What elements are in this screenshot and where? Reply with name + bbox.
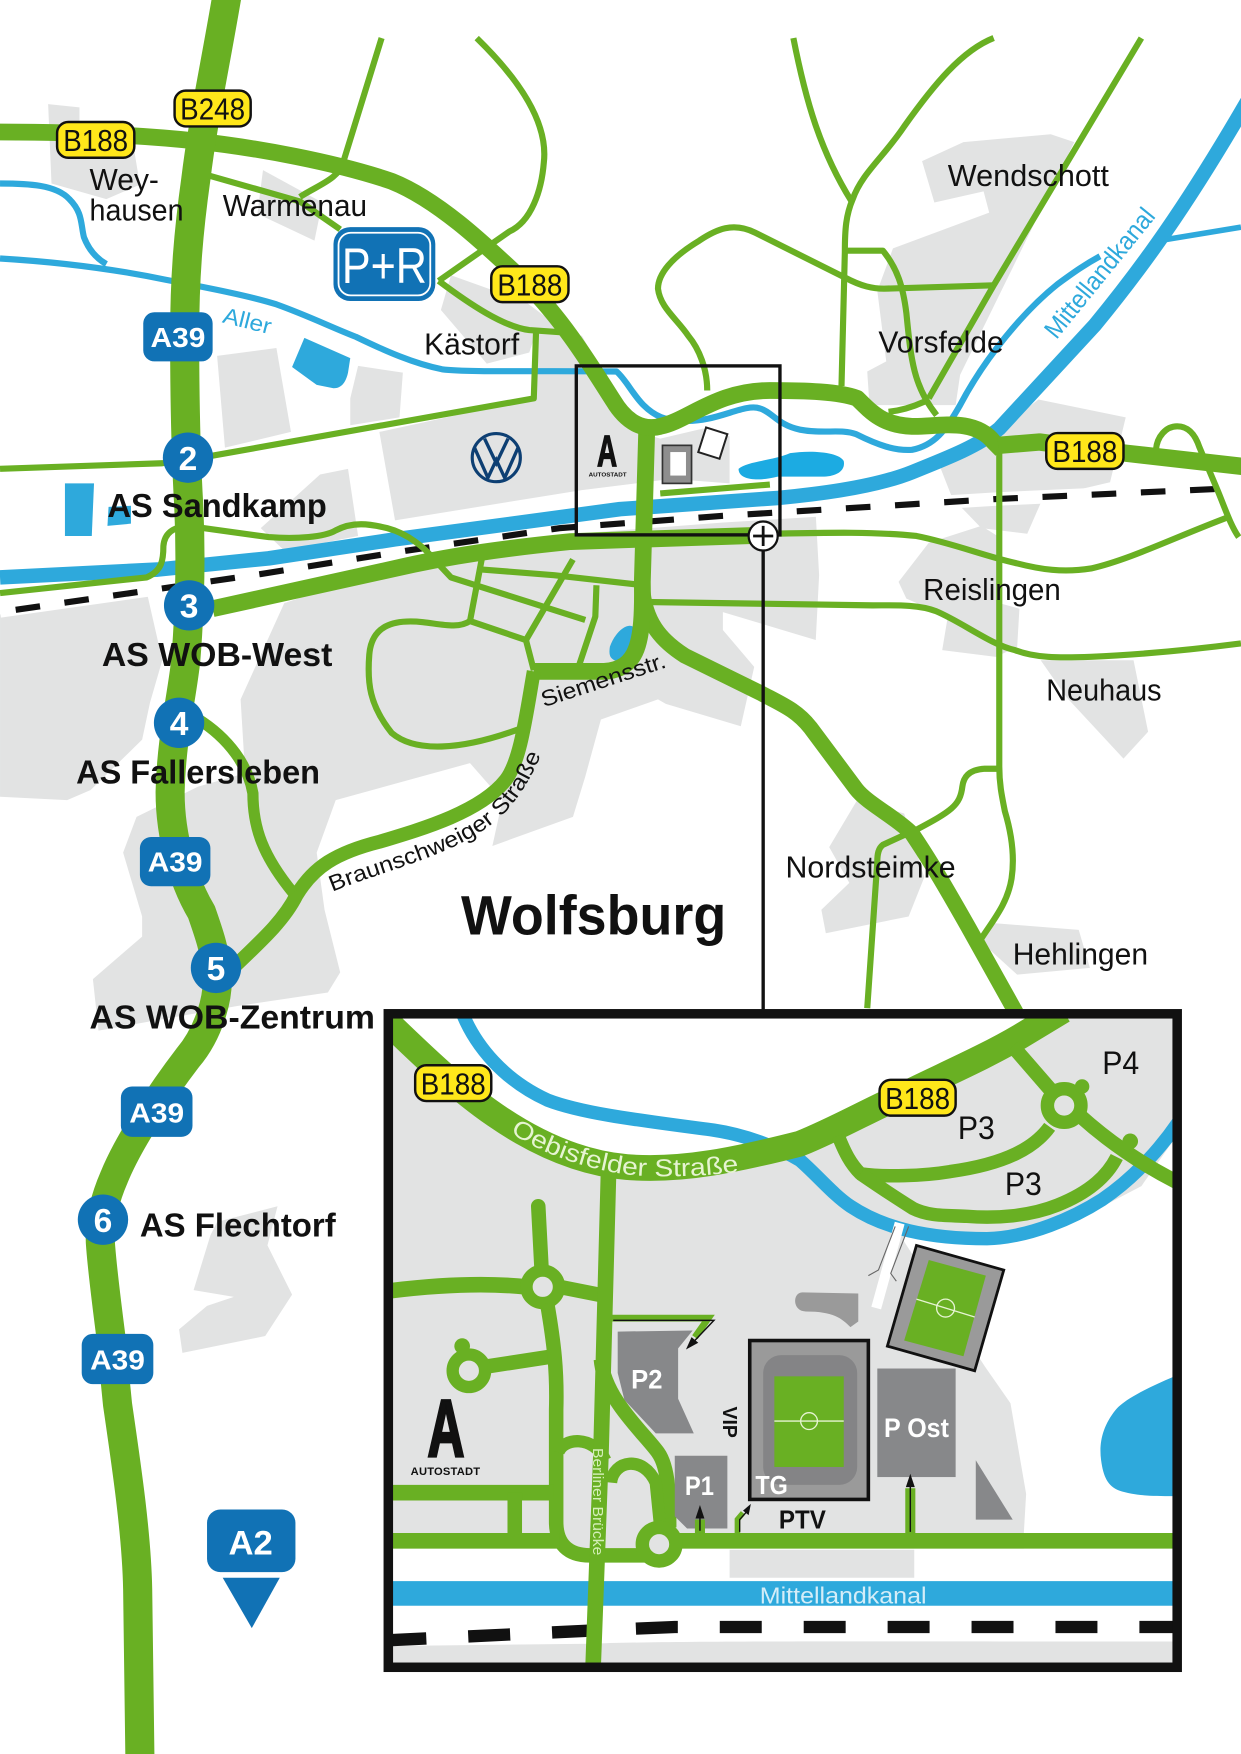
detail: PTV label: PTV	[779, 1507, 826, 1535]
settlement areas	[0, 104, 1148, 1353]
place names: Wendschott	[948, 160, 1110, 193]
A39 sign: A39	[129, 1097, 184, 1128]
detail: main stadium: TG	[755, 1472, 788, 1500]
mini training ground	[698, 427, 727, 459]
detail: main stadium	[750, 1341, 868, 1500]
small inset locator	[576, 366, 780, 535]
detail: Mittellandkanal: Mittellandkanal	[760, 1582, 927, 1608]
detail: Mittellandkanal	[393, 1581, 1172, 1606]
detail: P2 car park: P2	[631, 1365, 662, 1395]
place names	[90, 160, 1162, 972]
detail: parking labels: P3	[958, 1110, 995, 1146]
place names: Wey-	[90, 164, 159, 197]
icon: VW logo	[472, 434, 520, 482]
detail: P1 car park	[675, 1456, 727, 1529]
P+R sign: P+R	[342, 237, 427, 294]
minor roads	[0, 38, 1241, 1008]
exit 6	[78, 1195, 128, 1245]
city title: Wolfsburg	[461, 883, 726, 946]
detail: triangle car park	[976, 1460, 1013, 1520]
place names: Kästorf	[424, 329, 520, 362]
detail: P2 car park	[618, 1330, 694, 1433]
exit labels: AS WOB-West	[102, 637, 332, 674]
railway line	[0, 488, 1241, 611]
detail: Autostadt logo: AUTOSTADT	[411, 1466, 480, 1478]
A39 sign: A39	[148, 847, 203, 878]
detail: parking labels	[958, 1045, 1139, 1202]
place names: Vorsfelde	[878, 326, 1004, 359]
A39 sign: A39	[90, 1345, 145, 1376]
detail: railway	[384, 1627, 1181, 1640]
exit 5	[191, 943, 241, 993]
locator rectangle	[576, 366, 780, 535]
river Aller	[0, 184, 1100, 450]
detail: training stadium	[887, 1245, 1004, 1371]
detail: B188 signs: B188	[885, 1083, 950, 1116]
exit labels: AS WOB-Zentrum	[90, 999, 375, 1036]
detail: parking labels: P4	[1102, 1045, 1139, 1081]
B188 sign: B188	[497, 269, 562, 302]
mini stadium	[662, 445, 692, 483]
A2 sign with arrow	[207, 1510, 295, 1628]
detail: VIP label: VIP	[718, 1407, 740, 1438]
detail frame	[388, 1014, 1177, 1667]
detail: roads north	[386, 1010, 1181, 1217]
street labels: Siemensstr.	[538, 648, 669, 712]
street labels: Braunschweiger Straße	[328, 752, 540, 891]
detail: river	[462, 1013, 1181, 1239]
exit 5: 5	[207, 951, 225, 988]
detail: footbridge	[868, 1223, 909, 1308]
detail: B188 signs: B188	[421, 1068, 486, 1101]
detail: access arrows	[612, 1318, 915, 1533]
detail: Autostadt logo: A	[427, 1384, 464, 1474]
B188 sign: B188	[1052, 436, 1117, 469]
exit labels	[76, 488, 375, 1244]
detail: B188 signs	[415, 1065, 956, 1116]
water labels: Aller	[220, 303, 275, 339]
street labels	[328, 648, 669, 891]
detail map panel	[384, 1009, 1182, 1672]
exit 3	[164, 580, 214, 631]
detail: Autostadt logo	[410, 1399, 480, 1475]
exit 4: 4	[170, 706, 189, 743]
detail: P Ost car park	[877, 1369, 956, 1477]
A39 sign	[82, 1334, 153, 1384]
B248 sign: B248	[180, 94, 245, 127]
P+R sign	[333, 227, 435, 301]
place names: Reislingen	[923, 574, 1061, 607]
leader line to detail map	[749, 521, 778, 1009]
motorway A39	[100, 0, 227, 1754]
Autostadt mini logo: AUTOSTADT	[589, 473, 627, 479]
detail: parking labels: P3	[1005, 1166, 1042, 1202]
detail: Berliner Brücke: Berliner Brücke	[589, 1448, 605, 1555]
water labels: Mittellandkanal	[1039, 203, 1161, 344]
detail: Berliner Brücke	[589, 1164, 609, 1667]
city and feeder roads	[197, 427, 1016, 1013]
exit labels: AS Sandkamp	[107, 488, 327, 525]
exit 3: 3	[180, 589, 198, 626]
detail: street name on road	[510, 1132, 740, 1176]
A39 sign	[143, 312, 213, 361]
A39 sign	[121, 1087, 192, 1137]
detail: grey building	[795, 1292, 858, 1327]
detail: lake	[1100, 1375, 1177, 1496]
exit 6: 6	[94, 1203, 112, 1240]
place names: Nordsteimke	[786, 851, 956, 884]
detail: roads west	[386, 1206, 1181, 1561]
water: lakes and ponds	[65, 338, 844, 660]
water labels	[220, 203, 1161, 344]
detail: grey site areas	[386, 1016, 1181, 1667]
detail map panel: Oebisfelder Straße	[514, 1122, 737, 1176]
exit 2: 2	[179, 441, 197, 478]
detail: P Ost car park: P Ost	[884, 1413, 949, 1443]
A2 sign with arrow: A2	[229, 1524, 273, 1562]
Mittellandkanal	[0, 101, 1241, 577]
road B188	[0, 132, 1241, 467]
place names: Hehlingen	[1013, 939, 1148, 972]
Autostadt mini logo: A	[597, 427, 617, 477]
A39 sign: A39	[151, 322, 205, 353]
exit 4	[154, 698, 204, 748]
place names: hausen	[90, 194, 184, 227]
exit 2	[163, 432, 213, 483]
place names: Warmenau	[223, 190, 367, 223]
A39 sign	[140, 837, 210, 886]
detail: P1 car park: P1	[685, 1471, 714, 1501]
exit labels: AS Fallersleben	[76, 754, 320, 791]
exit labels: AS Flechtorf	[140, 1207, 337, 1244]
place names: Neuhaus	[1046, 674, 1162, 707]
detail: junction bumps	[454, 1079, 1138, 1354]
B188 sign: B188	[63, 125, 128, 158]
